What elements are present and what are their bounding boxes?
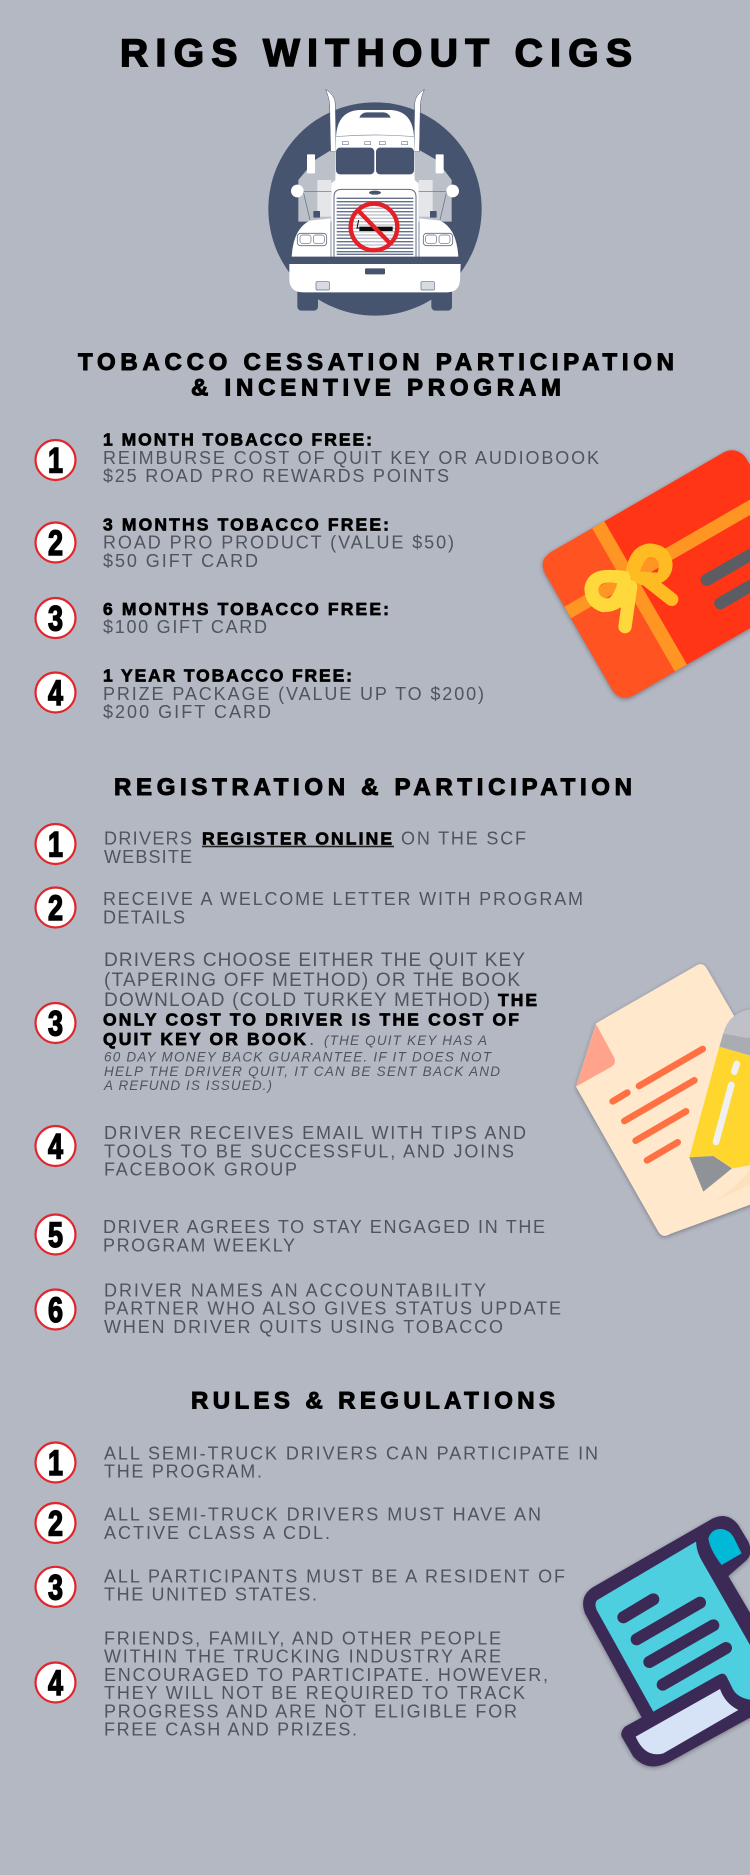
step 1: DRIVERS: [104, 829, 192, 849]
step 4: [36, 1123, 526, 1180]
rule 4: ENCOURAGED TO PARTICIPATE. HOWEVER,: [104, 1665, 548, 1685]
step 3: DOWNLOAD (COLD TURKEY METHOD): [104, 990, 490, 1011]
step 2: [36, 888, 583, 928]
step 6: [36, 1280, 561, 1337]
step 3: (THE QUIT KEY HAS A: [324, 1033, 487, 1048]
rule 1: 1: [48, 1444, 63, 1483]
step 4: FACEBOOK GROUP: [104, 1160, 297, 1180]
step 3: [36, 950, 537, 1093]
step 5: PROGRAM WEEKLY: [103, 1236, 295, 1256]
step 3: ONLY COST TO DRIVER IS THE COST OF: [103, 1010, 519, 1030]
step 3: (TAPERING OFF METHOD) OR THE BOOK: [104, 970, 520, 991]
step 3: 3: [48, 1004, 63, 1044]
step 3: HELP THE DRIVER QUIT, IT CAN BE SENT BACK AND: [104, 1064, 500, 1079]
rule 2: [36, 1503, 541, 1544]
item: 3 months: ROAD PRO PRODUCT (VALUE $50): [103, 533, 454, 553]
step 5: [36, 1214, 545, 1256]
step 3: DRIVERS CHOOSE EITHER THE QUIT KEY: [104, 950, 525, 971]
item: 6 months: [36, 598, 389, 638]
icon: document and pencil: [576, 964, 750, 1236]
heading: incentive program: [78, 349, 674, 402]
rule 4: WITHIN THE TRUCKING INDUSTRY ARE: [104, 1647, 501, 1667]
rule 2: ALL SEMI-TRUCK DRIVERS MUST HAVE AN: [104, 1505, 541, 1525]
rule 1: THE PROGRAM.: [104, 1462, 262, 1482]
step 1: [36, 824, 526, 867]
step 2: RECEIVE A WELCOME LETTER WITH PROGRAM: [103, 889, 583, 909]
step 6: PARTNER WHO ALSO GIVES STATUS UPDATE: [104, 1299, 561, 1319]
step 5: 5: [48, 1216, 63, 1255]
rule 4: FRIENDS, FAMILY, AND OTHER PEOPLE: [104, 1628, 501, 1648]
panel: tobacco cessation incentive program: [36, 349, 750, 722]
heading: rules: RULES & REGULATIONS: [191, 1388, 555, 1415]
rule 3: 3: [48, 1568, 63, 1607]
item: 1 month: 1: [48, 442, 63, 480]
item: 3 months: 2: [48, 524, 63, 563]
rule 4: 4: [48, 1664, 63, 1703]
item: 3 months: $50 GIFT CARD: [103, 551, 258, 571]
step 1: ON THE SCF: [401, 829, 526, 849]
item: 1 year: [36, 666, 484, 722]
rule 3: THE UNITED STATES.: [104, 1585, 317, 1605]
step 1: 1: [48, 826, 63, 864]
title: RIGS WITHOUT CIGS: [120, 32, 632, 75]
item: 3 months: [36, 514, 454, 571]
heading: incentive program: & INCENTIVE PROGRAM: [191, 374, 561, 402]
rule 1: ALL SEMI-TRUCK DRIVERS CAN PARTICIPATE IN: [104, 1443, 598, 1463]
step 3: .: [309, 1029, 314, 1050]
step 3: 60 DAY MONEY BACK GUARANTEE. IF IT DOES NOT: [104, 1050, 493, 1065]
icon: gift card: [537, 444, 750, 703]
rule 4: THEY WILL NOT BE REQUIRED TO TRACK: [104, 1683, 525, 1703]
step 3: QUIT KEY OR BOOK: [103, 1029, 306, 1049]
item: 1 year: PRIZE PACKAGE (VALUE UP TO $200): [103, 684, 484, 704]
item: 6 months: 6 MONTHS TOBACCO FREE:: [103, 599, 389, 619]
step 3: A REFUND IS ISSUED.): [103, 1078, 272, 1093]
item: 1 year: $200 GIFT CARD: [103, 702, 271, 722]
panel: registration and participation: [36, 774, 750, 1337]
item: 1 year: 4: [48, 674, 63, 713]
heading: incentive program: TOBACCO CESSATION PARTICIPATION: [78, 349, 674, 376]
item: 1 month: [36, 430, 599, 486]
step 2: 2: [48, 889, 63, 928]
step 6: WHEN DRIVER QUITS USING TOBACCO: [104, 1317, 503, 1337]
step 4: TOOLS TO BE SUCCESSFUL, AND JOINS: [104, 1141, 514, 1161]
rule 2: 2: [48, 1504, 63, 1544]
step 3: THE: [498, 990, 537, 1010]
rule 3: [36, 1566, 565, 1607]
step 4: 4: [48, 1128, 63, 1166]
step 1: REGISTER ONLINE: [202, 829, 392, 849]
item: 1 year: 1 YEAR TOBACCO FREE:: [103, 666, 352, 686]
rule 1: [36, 1442, 598, 1483]
step 5: DRIVER AGREES TO STAY ENGAGED IN THE: [103, 1217, 545, 1237]
item: 1 month: $25 ROAD PRO REWARDS POINTS: [103, 466, 449, 486]
item: 1 month: REIMBURSE COST OF QUIT KEY OR AUDIOBOOK: [103, 448, 599, 468]
rule 4: PROGRESS AND ARE NOT ELIGIBLE FOR: [104, 1701, 517, 1721]
rule 4: FREE CASH AND PRIZES.: [104, 1720, 357, 1740]
item: 6 months: 3: [48, 600, 63, 638]
item: 6 months: $100 GIFT CARD: [103, 617, 267, 637]
step 2: DETAILS: [103, 908, 185, 928]
rule 2: ACTIVE CLASS A CDL.: [104, 1523, 330, 1543]
panel: rules and regulations: [36, 1388, 750, 1766]
icon: paper scroll: [583, 1516, 750, 1766]
rule 4: [36, 1628, 548, 1740]
step 4: DRIVER RECEIVES EMAIL WITH TIPS AND: [104, 1123, 526, 1143]
item: 1 month: 1 MONTH TOBACCO FREE:: [103, 430, 372, 450]
item: 3 months: 3 MONTHS TOBACCO FREE:: [103, 514, 389, 534]
step 1: WEBSITE: [104, 847, 192, 867]
step 6: 6: [48, 1291, 63, 1330]
step 6: DRIVER NAMES AN ACCOUNTABILITY: [104, 1280, 486, 1300]
rule 3: ALL PARTICIPANTS MUST BE A RESIDENT OF: [104, 1566, 565, 1586]
icon: semi truck with no smoking sign: [268, 89, 482, 316]
heading: registration: REGISTRATION & PARTICIPATION: [114, 774, 632, 801]
